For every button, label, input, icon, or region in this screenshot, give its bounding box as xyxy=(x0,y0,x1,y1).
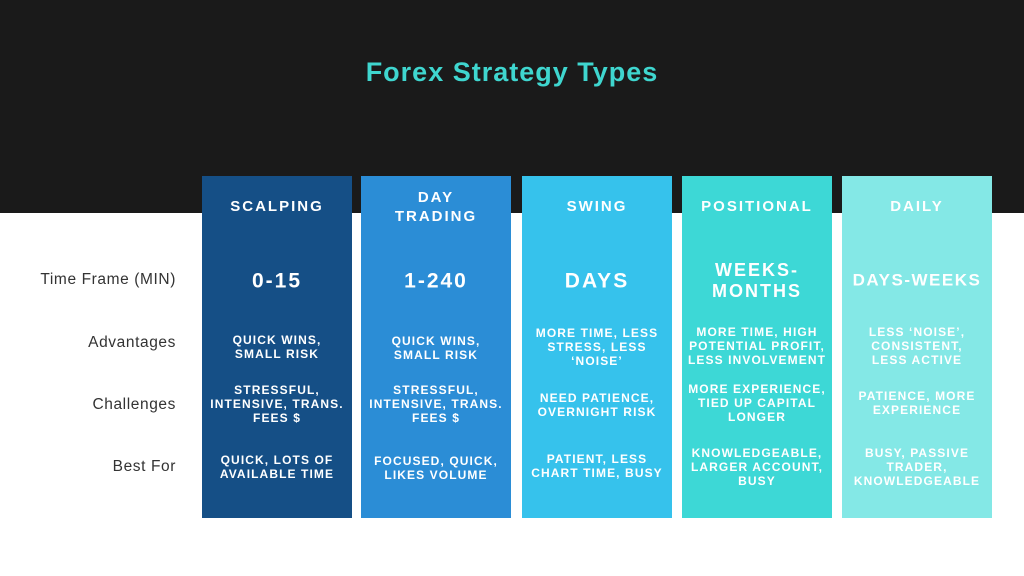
panel: positional: MORE TIME, HIGH xyxy=(696,325,818,339)
panel: scalping: FEES $ xyxy=(253,411,301,425)
panel: scalping xyxy=(202,176,352,518)
panel: day trading: TRADING xyxy=(395,208,477,225)
text: Advantages xyxy=(88,334,176,351)
panel: positional: KNOWLEDGEABLE, xyxy=(692,446,822,460)
panel: day trading: INTENSIVE, TRANS. xyxy=(369,397,503,411)
panel: daily: TRADER, xyxy=(886,460,948,474)
panel: swing: MORE TIME, LESS xyxy=(536,326,658,340)
panel: positional: POTENTIAL PROFIT, xyxy=(689,339,825,353)
panel: positional: LESS INVOLVEMENT xyxy=(688,353,826,367)
panel: daily: KNOWLEDGEABLE xyxy=(854,474,980,488)
panel: positional: BUSY xyxy=(738,474,776,488)
panel: swing: PATIENT, LESS xyxy=(547,452,647,466)
text: Challenges xyxy=(92,396,176,413)
panel: positional: LARGER ACCOUNT, xyxy=(691,460,823,474)
panel: daily: EXPERIENCE xyxy=(873,403,961,417)
panel: scalping: INTENSIVE, TRANS. xyxy=(210,397,344,411)
panel: scalping: SCALPING xyxy=(230,198,324,215)
panel: day trading: 1-240 xyxy=(404,270,468,292)
panel: day trading: LIKES VOLUME xyxy=(384,468,488,482)
panel: day trading: SMALL RISK xyxy=(394,348,478,362)
panel: daily xyxy=(842,176,992,518)
panel: positional xyxy=(682,176,832,518)
panel: positional: POSITIONAL xyxy=(701,198,813,215)
title: Forex Strategy Types xyxy=(366,57,658,87)
panel: daily: LESS ACTIVE xyxy=(872,353,962,367)
panel: daily: PATIENCE, MORE xyxy=(859,389,975,403)
panel: swing: STRESS, LESS xyxy=(547,340,647,354)
panel: day trading: FEES $ xyxy=(412,411,460,425)
row labels xyxy=(40,271,176,475)
panel: day trading: QUICK WINS, xyxy=(392,334,480,348)
panel: day trading: DAY xyxy=(418,189,454,206)
panel: swing: SWING xyxy=(567,198,627,215)
panel: swing: DAYS xyxy=(565,270,629,292)
panel: scalping: QUICK, LOTS OF xyxy=(221,453,333,467)
panel: positional: WEEKS- xyxy=(715,260,799,280)
panel: positional: LONGER xyxy=(728,410,786,424)
panel: scalping: 0-15 xyxy=(252,270,302,292)
text: Time Frame (MIN) xyxy=(40,271,176,288)
panel: daily: DAILY xyxy=(890,198,944,215)
panel: day trading xyxy=(361,176,511,518)
text: Best For xyxy=(113,458,176,475)
panel: swing: NEED PATIENCE, xyxy=(540,391,654,405)
panel: positional: TIED UP CAPITAL xyxy=(698,396,816,410)
panel: daily: BUSY, PASSIVE xyxy=(865,446,969,460)
panel: swing xyxy=(522,176,672,518)
panel: positional: MONTHS xyxy=(712,281,802,301)
panel: scalping: STRESSFUL, xyxy=(234,383,320,397)
panel: swing: ‘NOISE’ xyxy=(571,354,623,368)
panel: positional: MORE EXPERIENCE, xyxy=(688,382,826,396)
panel: daily: CONSISTENT, xyxy=(871,339,963,353)
panel: day trading: FOCUSED, QUICK, xyxy=(374,454,498,468)
panel: daily: LESS ‘NOISE’, xyxy=(869,325,965,339)
panel: swing: CHART TIME, BUSY xyxy=(531,466,663,480)
panel: scalping: AVAILABLE TIME xyxy=(220,467,334,481)
panel: day trading: STRESSFUL, xyxy=(393,383,479,397)
panel: scalping: SMALL RISK xyxy=(235,347,319,361)
panel: scalping: QUICK WINS, xyxy=(233,333,321,347)
panel: swing: OVERNIGHT RISK xyxy=(538,405,656,419)
panel: daily: DAYS-WEEKS xyxy=(853,270,981,290)
